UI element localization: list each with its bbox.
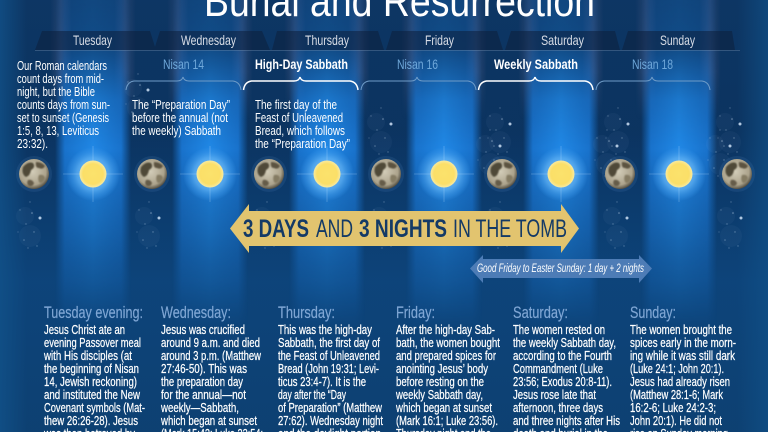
column: Thursday: the Feast of Unleavened xyxy=(278,349,380,363)
tab band xyxy=(35,31,735,50)
column: Saturday: 23:56; Exodus 20:8-11). xyxy=(513,375,612,389)
intro note: set to sunset (Genesis xyxy=(17,111,109,125)
column: Saturday: Commandment (Luke xyxy=(513,362,603,376)
Hebrew date labels xyxy=(163,56,673,72)
arrow: 3 days and 3 nights: 3 NIGHTS xyxy=(359,215,447,243)
column: Tuesday evening: evening Passover meal xyxy=(44,336,141,350)
arrow: Good Friday to Easter Sunday: Good Friday to Easter Sunday: 1 day + 2 nights xyxy=(477,263,644,275)
high-day sabbath note: the “Preparation Day” xyxy=(255,137,350,151)
column: Tuesday evening: Jesus Christ ate an xyxy=(44,323,125,337)
column: Saturday: The women rested on xyxy=(513,323,605,337)
column: Tuesday evening: Tuesday evening: xyxy=(44,303,143,322)
daylight beams xyxy=(50,0,721,330)
column: Wednesday: for the annual—not xyxy=(161,388,246,402)
day names: Wednesday xyxy=(181,32,236,48)
intro note: 23:32). xyxy=(17,137,48,151)
column: Wednesday: around 9 a.m. and died xyxy=(161,336,260,350)
column: Friday: bath, the women bought xyxy=(396,336,500,350)
high-day sabbath note: Feast of Unleavened xyxy=(255,111,343,125)
intro note: 1:5, 8, 13, Leviticus xyxy=(17,124,99,138)
column: Tuesday evening: with His disciples (at xyxy=(43,349,132,363)
intro note: night, but the Bible xyxy=(17,85,95,99)
column: Wednesday: weekly—Sabbath, xyxy=(160,401,239,415)
icons: moons and suns xyxy=(16,146,755,202)
column: Wednesday xyxy=(160,303,263,432)
day names xyxy=(73,32,695,48)
column: Saturday xyxy=(513,303,620,432)
column: Sunday: spices early in the morn- xyxy=(630,336,736,350)
column: Friday: anointing Jesus’ body xyxy=(396,362,489,376)
column: Wednesday: the preparation day xyxy=(161,375,244,389)
column: Friday: and prepared spices for xyxy=(396,349,496,363)
arrow: 3 days and 3 nights xyxy=(230,204,579,253)
column: Sunday: ing while it was still dark xyxy=(630,349,736,363)
column: Sunday: John 20:1). He did not xyxy=(630,414,722,428)
column: Sunday: The women brought the xyxy=(630,323,732,337)
column: Sunday xyxy=(630,303,736,432)
Hebrew date labels: Nisan 16 xyxy=(397,56,438,72)
arrow: Good Friday to Easter Sunday xyxy=(470,255,652,283)
star clusters xyxy=(16,73,742,249)
arrow: 3 days and 3 nights: AND xyxy=(316,215,353,243)
column: Sunday: Sunday: xyxy=(630,303,676,322)
column: Tuesday evening: thew 26:26-28). Jesus xyxy=(44,414,138,428)
column: Friday xyxy=(395,303,500,432)
column: Tuesday evening: and instituted the New xyxy=(44,388,141,402)
preparation day note: The “Preparation Day” xyxy=(132,98,230,112)
column: Tuesday evening: 14, Jewish reckoning) xyxy=(44,375,137,389)
column: Tuesday evening xyxy=(43,303,145,432)
column: Saturday: Jesus rose late that xyxy=(513,388,596,402)
preparation day note xyxy=(132,98,230,138)
column: Sunday: (Matthew 28:1-6; Mark xyxy=(630,388,724,402)
column: Saturday: Saturday: xyxy=(513,303,568,322)
Hebrew date labels: High-Day Sabbath xyxy=(255,56,348,72)
day tabs xyxy=(35,31,740,50)
column: Friday: before resting on the xyxy=(396,375,484,389)
column: Thursday: day after the “Day xyxy=(278,388,347,402)
column: Wednesday: which began at sunset xyxy=(160,414,257,428)
column: Saturday: according to the Fourth xyxy=(513,349,612,363)
column: Saturday: the weekly Sabbath day, xyxy=(513,336,616,350)
column: Sunday: Jesus had already risen xyxy=(630,375,730,389)
column: Friday: After the high-day Sab- xyxy=(396,323,495,337)
intro note: Our Roman calendars xyxy=(17,59,107,73)
brackets xyxy=(126,77,710,90)
Hebrew date labels: Nisan 14 xyxy=(163,56,204,72)
column: Saturday: afternoon, three days xyxy=(513,401,603,415)
day names: Saturday xyxy=(541,32,584,48)
column: Wednesday: 27:46-50). This was xyxy=(161,362,247,376)
column: Thursday: Thursday: xyxy=(278,303,335,322)
day names: Friday xyxy=(425,32,454,48)
column: Sunday: 16:2-6; Luke 24:2-3; xyxy=(630,401,716,415)
preparation day note: before the annual (not xyxy=(132,111,228,125)
high-day sabbath note: The first day of the xyxy=(255,98,337,112)
column: Thursday xyxy=(278,303,383,432)
preparation day note: the weekly) Sabbath xyxy=(132,124,221,138)
column: Wednesday: around 3 p.m. (Matthew xyxy=(161,349,262,363)
day names: Sunday xyxy=(660,32,695,48)
high-day sabbath note: Bread, which follows xyxy=(255,124,345,138)
column: Thursday: Bread (John 19:31; Levi- xyxy=(278,362,379,376)
column: Thursday: 27:62). Wednesday night xyxy=(278,414,383,428)
column: Thursday: Sabbath, the first day of xyxy=(278,336,380,350)
Hebrew date labels: Nisan 18 xyxy=(632,56,673,72)
column: Thursday: ticus 23:4-7). It is the xyxy=(278,375,366,389)
column: Thursday: of Preparation” (Matthew xyxy=(278,401,383,415)
intro note xyxy=(17,59,110,151)
column: Saturday: and three nights after His xyxy=(513,414,620,428)
intro note: counts days from sun- xyxy=(17,98,110,112)
column: Sunday: (Luke 24:1; John 20:1). xyxy=(630,362,724,376)
day names: Tuesday xyxy=(73,32,112,48)
column: Wednesday: Wednesday: xyxy=(161,303,231,322)
column: Friday: (Mark 16:1; Luke 23:56). xyxy=(396,414,498,428)
arrow: 3 days and 3 nights: 3 DAYS xyxy=(243,215,309,243)
intro note: count days from mid- xyxy=(17,72,104,86)
arrow: 3 days and 3 nights: IN THE TOMB xyxy=(453,215,567,243)
Hebrew date labels: Weekly Sabbath xyxy=(494,56,578,72)
column: Thursday: This was the high-day xyxy=(278,323,373,337)
day names: Thursday xyxy=(305,32,349,48)
column: Wednesday: Jesus was crucified xyxy=(161,323,245,337)
column: Friday: which began at sunset xyxy=(395,401,492,415)
column: Tuesday evening: Covenant symbols (Mat- xyxy=(44,401,145,415)
column: Friday: Friday: xyxy=(396,303,435,322)
column: Tuesday evening: the beginning of Nisan xyxy=(44,362,139,376)
high-day sabbath note xyxy=(255,98,350,151)
column: Friday: weekly Sabbath day, xyxy=(395,388,483,402)
